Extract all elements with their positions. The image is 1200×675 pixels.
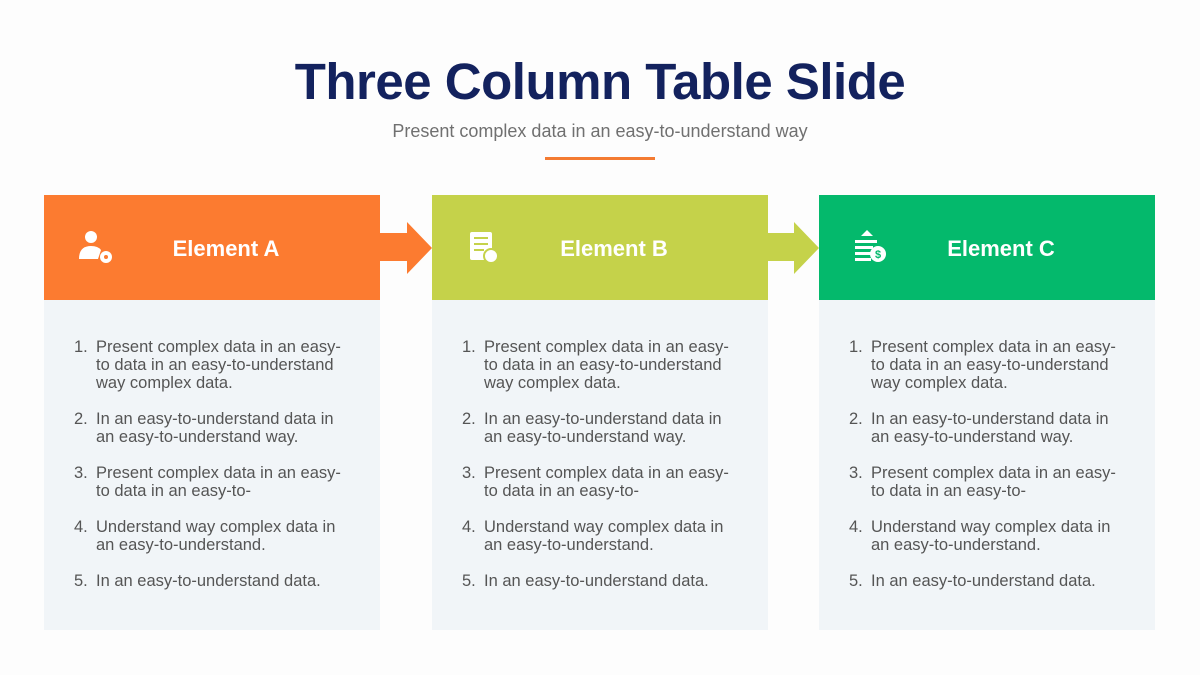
panel: Element C header [819,195,1155,300]
panel: Element B body: 2. [462,410,476,428]
panel: Element A body: Understand way complex data in an easy-to-understand. [96,518,335,554]
subtitle: Present complex data in an easy-to-understand way [392,121,808,141]
panel: Element B body: 5. [462,572,476,590]
panel: Element A body: 1. [74,338,88,356]
panel: Element B body: Understand way complex data in an easy-to-understand. [484,518,723,554]
panel: Element C body: In an easy-to-understand data in an easy-to-understand way. [871,410,1109,446]
panel: Element C body: Present complex data in an easy-to data in an easy-to-understand way complex data. [871,338,1116,392]
panel: Element B body: 3. [462,464,476,482]
panel: Element A body: 3. [74,464,88,482]
icon: money stack: $ [875,249,881,261]
panel: Element A header [44,195,380,300]
panel: Element A body: In an easy-to-understand data. [96,572,321,590]
panel: Element B body: In an easy-to-understand data. [484,572,709,590]
panel: Element B body: Present complex data in an easy-to data in an easy-to- [484,464,729,500]
icon: checklist clock [470,232,497,262]
title: Three Column Table Slide [295,53,905,110]
panel: Element A body: 4. [74,518,88,536]
panel: Element B body: 4. [462,518,476,536]
panel: Element B body: In an easy-to-understand data in an easy-to-understand way. [484,410,722,446]
panel: Element C body: 2. [849,410,863,428]
panel: Element C body: In an easy-to-understand data. [871,572,1096,590]
panel: Element C body [819,300,1155,630]
panel: Element C body: 4. [849,518,863,536]
panel: Element C body: Understand way complex data in an easy-to-understand. [871,518,1110,554]
panel: Element C body: 1. [849,338,863,356]
panel: Element B body: Present complex data in an easy-to data in an easy-to-understand way complex data. [484,338,729,392]
panel: Element A body: Present complex data in an easy-to data in an easy-to-understand way complex data. [96,338,341,392]
icon: user gear [79,231,112,263]
panel: Element A body: In an easy-to-understand data in an easy-to-understand way. [96,410,334,446]
panel: Element B header [432,195,768,300]
panel: Element C body: 5. [849,572,863,590]
icon: money stack [855,230,886,262]
panel: Element A body: 2. [74,410,88,428]
panel: Element B body [432,300,768,630]
arrow B to C [768,222,819,274]
panel: Element A body: 5. [74,572,88,590]
panel: Element A body [44,300,380,630]
panel: Element A body: Present complex data in an easy-to data in an easy-to- [96,464,341,500]
panel: Element C header: Element C [947,236,1055,261]
panel: Element B body: 1. [462,338,476,356]
panel: Element A header: Element A [173,236,279,261]
panel: Element B header: Element B [560,236,668,261]
panel: Element C body: Present complex data in an easy-to data in an easy-to- [871,464,1116,500]
arrow A to B [380,222,432,274]
panel: Element C body: 3. [849,464,863,482]
